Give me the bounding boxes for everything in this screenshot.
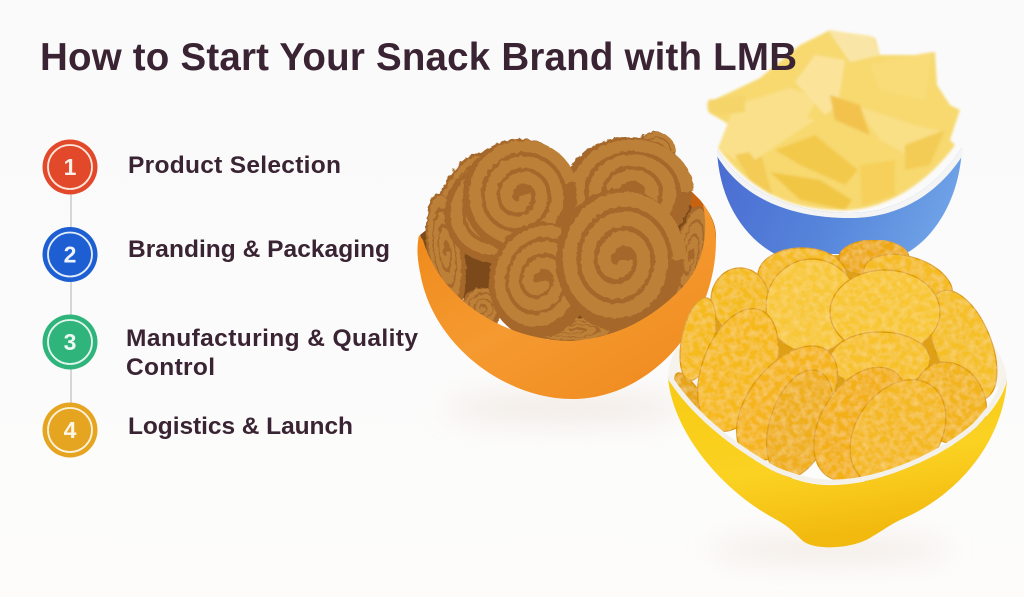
badge 2: 2 — [64, 242, 76, 268]
label 3 — [126, 325, 418, 381]
timeline connector — [70, 192, 72, 405]
step 1 — [42, 140, 341, 194]
label 2: Branding & Packaging — [128, 236, 390, 263]
bowl: orange with spiral snacks — [417, 126, 716, 399]
step 4 — [42, 402, 353, 458]
badge 1: 1 — [64, 154, 77, 180]
chip bed — [712, 255, 968, 435]
bowl shadows — [445, 394, 950, 562]
orange bowl front — [417, 204, 716, 399]
bowl: blue with pale chips — [707, 30, 963, 254]
step 3 — [42, 314, 418, 381]
badge 4 — [42, 402, 98, 458]
badge 1 — [42, 140, 98, 194]
label 3: Control — [126, 354, 215, 381]
badge 2 — [42, 227, 98, 282]
spiral snacks — [420, 126, 714, 346]
badge 4: 4 — [64, 417, 77, 443]
label 4: Logistics & Launch — [128, 413, 353, 440]
step 2 — [42, 227, 390, 282]
label 1: Product Selection — [128, 152, 341, 179]
round chips — [667, 240, 1011, 505]
yellow bowl front and rim — [668, 377, 1007, 547]
badge 3: 3 — [64, 329, 76, 355]
title: How to Start Your Snack Brand with LMB — [40, 36, 797, 79]
bowl: yellow with round chips — [667, 240, 1011, 547]
label 3: Manufacturing & Quality — [126, 325, 418, 352]
pale snack chips — [707, 30, 960, 210]
badge 3 — [42, 314, 98, 370]
